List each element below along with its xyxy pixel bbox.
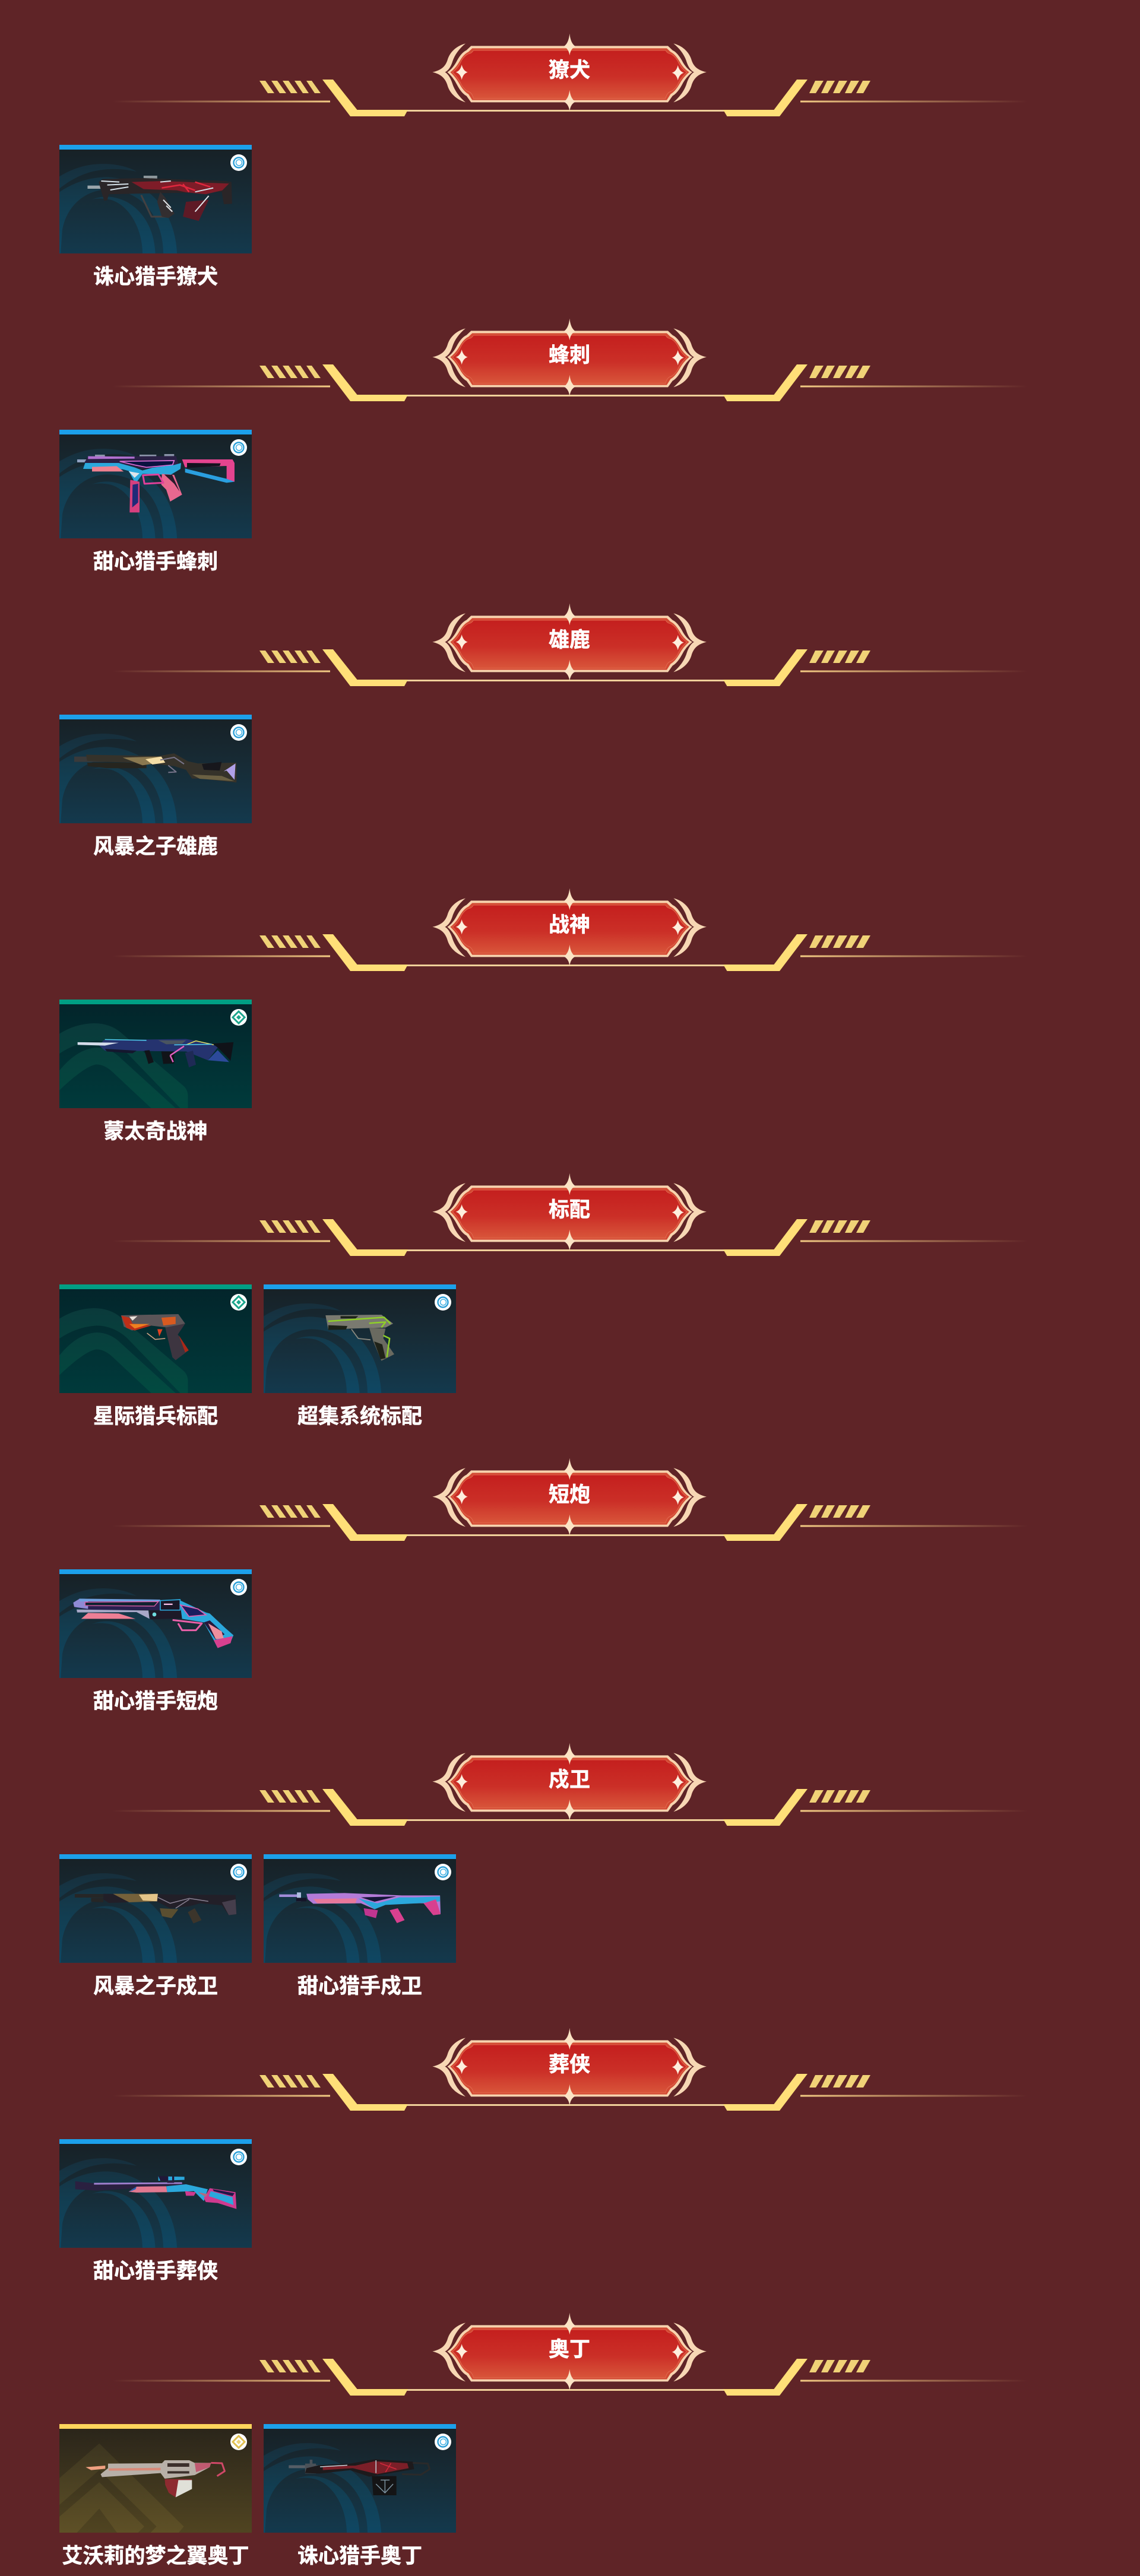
heading banner: 雄鹿 bbox=[113, 604, 1027, 686]
section: 战神 bbox=[59, 889, 1027, 1143]
section: 雄鹿 bbox=[55, 604, 1027, 858]
section: 短炮 bbox=[55, 1458, 1027, 1713]
heading banner: 戍卫: 戍卫 bbox=[549, 1768, 590, 1791]
heading banner: 战神: 战神 bbox=[549, 913, 590, 937]
weapon card: 甜心猎手葬侠 bbox=[55, 2139, 252, 2283]
heading banner: 短炮 bbox=[113, 1458, 1027, 1541]
weapon card: 超集系统标配 bbox=[259, 1284, 456, 1428]
heading banner: 戍卫 bbox=[113, 1743, 1027, 1826]
heading banner: 标配: 标配 bbox=[549, 1198, 590, 1222]
weapon card: 甜心猎手蜂刺: 甜心猎手蜂刺 bbox=[93, 550, 218, 573]
heading banner: 战神 bbox=[113, 889, 1027, 971]
heading banner: 奥丁: 奥丁 bbox=[549, 2338, 590, 2361]
heading banner: 蜂刺: 蜂刺 bbox=[549, 344, 590, 367]
heading banner: 獠犬 bbox=[113, 34, 1027, 116]
heading banner: 葬侠 bbox=[113, 2028, 1027, 2111]
section: 戍卫 bbox=[55, 1743, 1027, 1998]
heading banner: 奥丁 bbox=[113, 2313, 1027, 2396]
weapon card: 星际猎兵标配 bbox=[59, 1284, 252, 1428]
heading banner: 葬侠: 葬侠 bbox=[549, 2053, 590, 2076]
weapon card: 甜心猎手蜂刺 bbox=[55, 430, 252, 573]
weapon card: 甜心猎手葬侠: 甜心猎手葬侠 bbox=[93, 2260, 218, 2283]
section: 标配 bbox=[59, 1173, 1027, 1428]
heading banner: 标配 bbox=[113, 1173, 1027, 1256]
section: 獠犬 bbox=[55, 34, 1027, 288]
heading banner: 蜂刺 bbox=[113, 319, 1027, 401]
weapon card: 甜心猎手戍卫: 甜心猎手戍卫 bbox=[297, 1975, 422, 1998]
heading banner: 雄鹿: 雄鹿 bbox=[549, 629, 590, 652]
section: 奥丁 bbox=[59, 2313, 1027, 2568]
heading banner: 短炮: 短炮 bbox=[549, 1483, 590, 1506]
weapon card: 诛心猎手獠犬: 诛心猎手獠犬 bbox=[93, 265, 218, 288]
weapon card: 蒙太奇战神: 蒙太奇战神 bbox=[103, 1120, 208, 1143]
weapon card: 星际猎兵标配: 星际猎兵标配 bbox=[93, 1405, 218, 1428]
weapon card: 超集系统标配: 超集系统标配 bbox=[297, 1405, 422, 1428]
weapon card: 艾沃莉的梦之翼奥丁 bbox=[59, 2424, 252, 2568]
heading banner: 獠犬: 獠犬 bbox=[549, 59, 590, 82]
weapon card: 甜心猎手短炮: 甜心猎手短炮 bbox=[93, 1690, 218, 1713]
weapon card: 甜心猎手戍卫 bbox=[259, 1854, 456, 1998]
section: 葬侠 bbox=[55, 2028, 1027, 2283]
weapon card: 风暴之子戍卫 bbox=[55, 1854, 252, 1998]
weapon card: 蒙太奇战神 bbox=[59, 1000, 252, 1143]
weapon card: 风暴之子雄鹿 bbox=[55, 715, 252, 858]
weapon card: 风暴之子雄鹿: 风暴之子雄鹿 bbox=[93, 835, 218, 858]
weapon card: 艾沃莉的梦之翼奥丁: 艾沃莉的梦之翼奥丁 bbox=[62, 2545, 249, 2568]
weapon card: 诛心猎手奥丁 bbox=[259, 2424, 456, 2568]
weapon card: 诛心猎手奥丁: 诛心猎手奥丁 bbox=[297, 2545, 422, 2568]
weapon card: 甜心猎手短炮 bbox=[55, 1569, 252, 1713]
weapon card: 风暴之子戍卫: 风暴之子戍卫 bbox=[93, 1975, 218, 1998]
section: 蜂刺 bbox=[55, 319, 1027, 573]
weapon card: 诛心猎手獠犬 bbox=[55, 145, 252, 288]
